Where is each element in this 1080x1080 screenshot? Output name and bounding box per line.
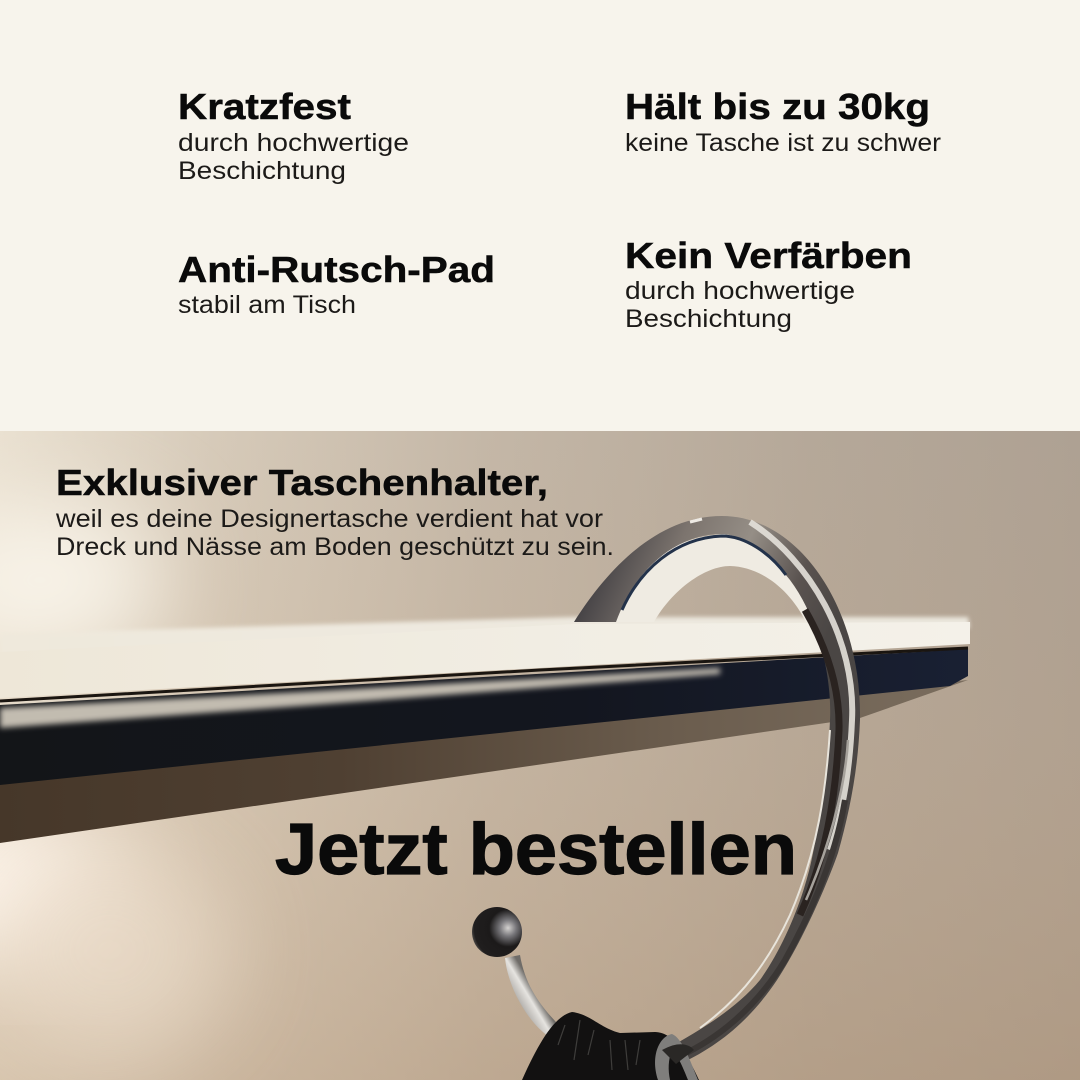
table shadow line (0, 648, 968, 701)
feature: Anti-Rutsch-Pad: stabil am Tisch (178, 291, 356, 319)
call to action: Jetzt bestellen (275, 810, 797, 890)
strap metal loop (655, 1034, 698, 1080)
table dark edge (0, 649, 968, 785)
feature: Kratzfest (178, 86, 409, 185)
headline block: Exklusiver Taschenhalter: weil es deine Designertasche verdient hat vor (55, 505, 603, 533)
feature: Kratzfest: Kratzfest (178, 86, 351, 127)
feature: Kein Verfärben: Kein Verfärben (625, 235, 912, 276)
headline block: Exklusiver Taschenhalter: Dreck und Nässe am Boden geschützt zu sein. (56, 533, 614, 561)
white pad under hook (612, 534, 812, 622)
photo: bag hook on table edge (0, 431, 1080, 1080)
feature: Kein Verfärben: durch hochwertige (625, 277, 855, 305)
feature: Kratzfest: Beschichtung (178, 157, 346, 185)
feature: Hält bis zu 30kg: Hält bis zu 30kg (625, 86, 930, 127)
table underside (0, 680, 968, 843)
table white front edge (0, 622, 970, 698)
strap texture (558, 1020, 640, 1070)
feature: Kein Verfärben (625, 235, 912, 333)
photo wall background (0, 431, 1080, 1080)
headline block: Exklusiver Taschenhalter (55, 462, 614, 561)
feature: Hält bis zu 30kg: keine Tasche ist zu schwer (625, 129, 941, 157)
hook metal ring (574, 516, 860, 1064)
hook ball (472, 907, 522, 957)
feature: Kratzfest: durch hochwertige (178, 129, 409, 157)
ring end over strap (662, 1044, 694, 1064)
feature: Kein Verfärben: Beschichtung (625, 305, 792, 333)
feature: Anti-Rutsch-Pad (178, 249, 495, 319)
table edge reflection (0, 668, 720, 728)
feature: Anti-Rutsch-Pad: Anti-Rutsch-Pad (178, 249, 495, 290)
page background (0, 0, 1080, 431)
headline block: Exklusiver Taschenhalter: Exklusiver Taschenhalter, (56, 462, 548, 503)
feature: Hält bis zu 30kg (625, 86, 941, 157)
table top surface (86, 614, 972, 648)
leather strap (522, 1012, 699, 1080)
hook stem (505, 955, 556, 1036)
